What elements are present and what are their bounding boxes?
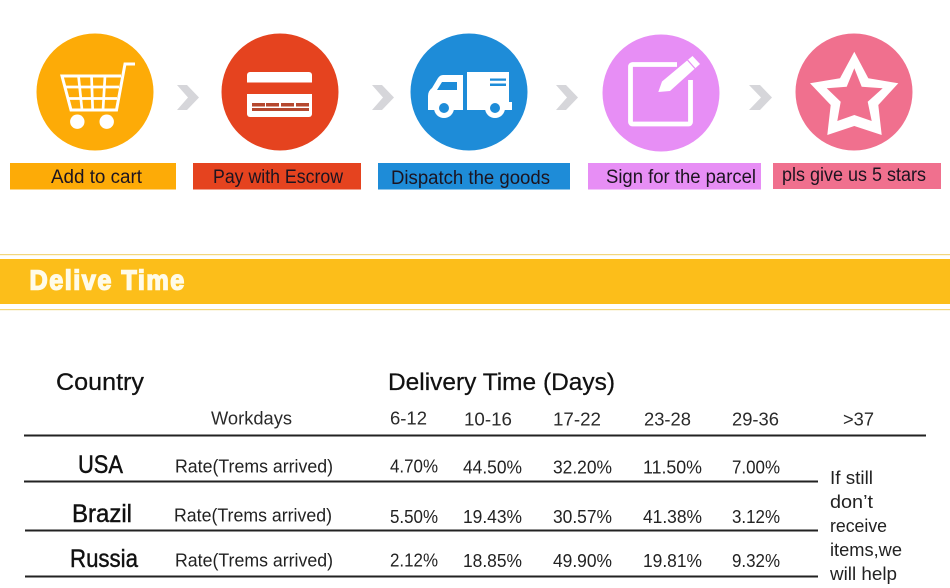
row: USA: 7.00% <box>732 456 780 478</box>
row: Brazil: Rate(Trems arrived) <box>174 504 332 526</box>
note: if still not received: will help <box>829 563 897 584</box>
table: delivery time by country <box>24 369 926 584</box>
row: Brazil: Brazil <box>72 500 132 528</box>
table headings: Delivery Time (Days) <box>388 369 615 396</box>
row: Brazil: 3.12% <box>732 506 780 527</box>
table headings: 29-36 <box>732 410 779 430</box>
row: Russia: Russia <box>70 545 138 573</box>
label: add to cart <box>10 163 176 190</box>
step 1: add to cart <box>10 34 176 190</box>
note: if still not received: receive <box>830 515 887 536</box>
step 4: sign for the parcel <box>588 34 761 190</box>
label: give us 5 stars: pls give us 5 stars <box>782 165 926 186</box>
row: Russia: 19.81% <box>643 550 702 571</box>
row: USA: 4.70% <box>390 456 438 476</box>
row: Brazil: 5.50% <box>390 506 438 527</box>
arrow 1 <box>177 85 199 110</box>
row: Russia: Rate(Trems arrived) <box>175 550 333 570</box>
step 2: pay with escrow <box>193 34 361 190</box>
icon: credit card <box>222 34 338 150</box>
note: if still not received: don’t <box>830 491 873 512</box>
label: add to cart: Add to cart <box>51 167 143 188</box>
table headings: 17-22 <box>553 410 601 430</box>
table headings: >37 <box>843 410 874 430</box>
row: Brazil: 19.43% <box>463 506 522 527</box>
note: if still not received: items,we <box>830 539 902 560</box>
row: USA: USA <box>78 451 123 479</box>
row: Russia <box>70 545 780 573</box>
label: dispatch the goods <box>378 163 570 190</box>
row: USA: 11.50% <box>643 456 702 478</box>
row: Brazil: 41.38% <box>643 506 702 527</box>
row: USA: Rate(Trems arrived) <box>175 456 333 476</box>
table headings: Country <box>56 369 144 396</box>
table rules <box>24 434 926 578</box>
table headings: 6-12 <box>390 408 427 428</box>
icon: note and pencil <box>602 34 720 152</box>
label: sign for the parcel: Sign for the parcel <box>606 167 756 188</box>
icon: star <box>796 34 912 150</box>
table headings: 10-16 <box>464 410 512 430</box>
row: Brazil: 30.57% <box>553 506 612 527</box>
heading: delive time: Delive Time <box>30 264 184 296</box>
icon: delivery truck <box>410 34 528 150</box>
label: pay with escrow <box>193 163 361 190</box>
label: dispatch the goods: Dispatch the goods <box>391 168 550 189</box>
table headings: 23-28 <box>644 410 691 430</box>
arrow 4 <box>749 85 772 110</box>
row: USA: 44.50% <box>463 456 522 478</box>
arrow 2 <box>372 85 394 110</box>
row: Russia: 18.85% <box>463 550 522 571</box>
row: USA <box>78 451 780 479</box>
table headings: Workdays <box>211 408 292 428</box>
row: Brazil <box>72 500 780 528</box>
note: if still not received <box>829 467 902 584</box>
arrow 3 <box>556 85 578 110</box>
icon: shopping cart <box>36 34 154 150</box>
row: USA: 32.20% <box>553 456 612 478</box>
row: Russia: 9.32% <box>732 550 780 571</box>
step 5: give five stars <box>773 34 941 189</box>
step 3: dispatch the goods <box>378 34 570 190</box>
row: Russia: 49.90% <box>553 550 612 571</box>
label: pay with escrow: Pay with Escrow <box>213 167 343 188</box>
banner: delive time <box>0 254 950 310</box>
note: if still not received: If still <box>830 467 873 488</box>
table headings <box>56 369 874 430</box>
row: Russia: 2.12% <box>390 550 438 570</box>
